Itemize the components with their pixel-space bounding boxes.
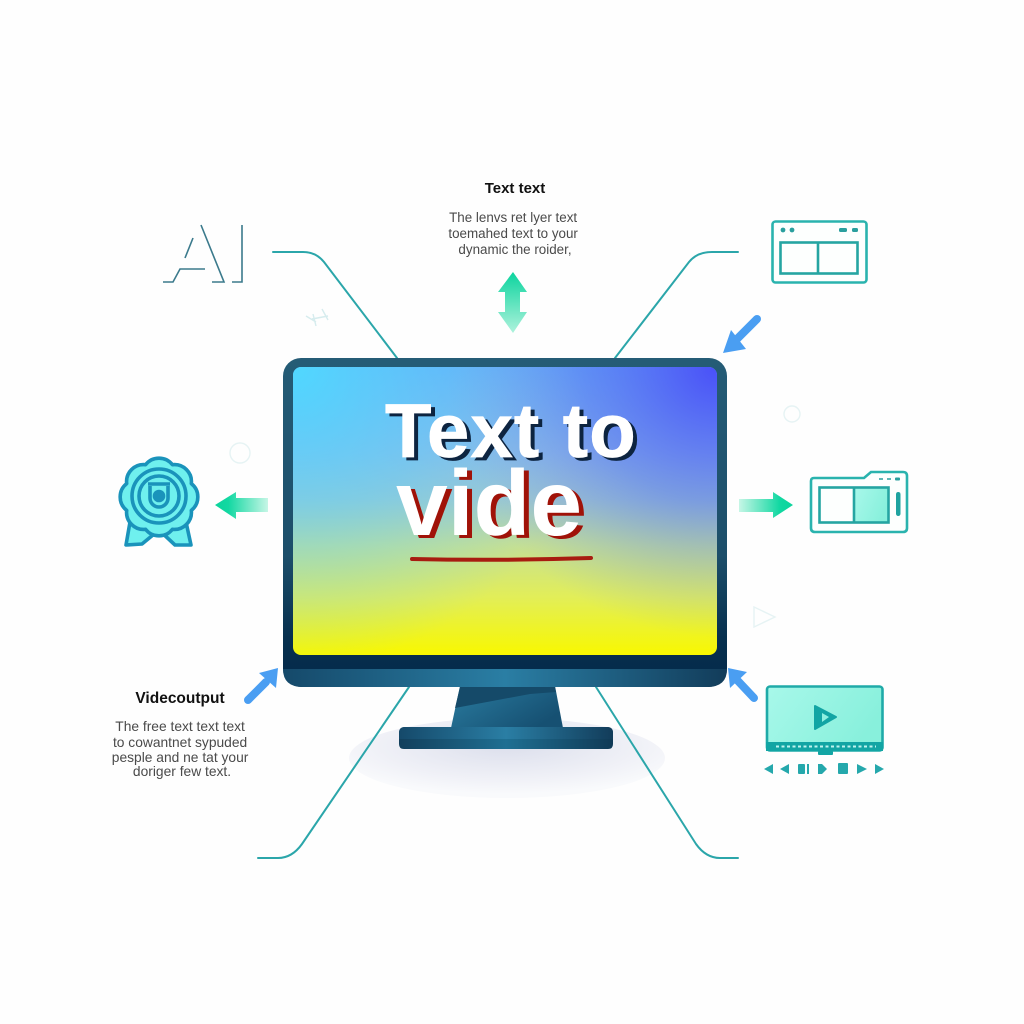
monitor screen: [293, 367, 717, 655]
heading: top text block: Text text: [485, 180, 545, 197]
heading: top text block: [448, 180, 582, 257]
icon: video player: [764, 686, 884, 774]
Videcoutput description text: doriger few text.: [133, 764, 231, 779]
arrow: blue bottom left: [248, 668, 278, 700]
monitor: [283, 358, 727, 749]
arrow: green pointing right: [739, 492, 793, 518]
Videcoutput description text: to cowantnet sypuded: [113, 735, 247, 750]
connector lines: [258, 252, 738, 858]
screen title: Text to: Text to: [385, 389, 637, 474]
screen title: Text to: Text to: [389, 392, 641, 477]
text block: Videcoutput: Videcoutput: [135, 690, 225, 707]
monitor stand shadow: [349, 718, 665, 798]
icon: camera window: [811, 472, 907, 532]
arrow: green pointing left: [215, 492, 268, 519]
Videcoutput description text: pesple and ne tat your: [112, 750, 249, 765]
top description text: dynamic the roider,: [458, 242, 572, 257]
monitor base: [399, 727, 613, 749]
icon: browser window: [772, 222, 866, 282]
arrow: vertical double green: [498, 272, 527, 333]
faint decorative marks: [230, 309, 800, 627]
monitor stand neck: [451, 686, 563, 728]
screen title: vide: vide: [401, 454, 587, 558]
top description text: The lenvs ret lyer text: [449, 210, 577, 225]
icon: AI outline lettering: [163, 225, 242, 282]
screen title: vide: vide: [396, 451, 582, 555]
Videcoutput description text: The free text text text: [115, 719, 245, 734]
arrow: blue bottom right: [728, 668, 754, 698]
red underline: [412, 558, 591, 560]
video player controls: [764, 763, 884, 774]
monitor bezel: [283, 358, 727, 687]
icon: award badge: [120, 458, 198, 545]
top description text: toemahed text to your: [448, 226, 578, 241]
text block: Videcoutput: [112, 690, 252, 779]
arrow: blue pointing to monitor top right: [723, 319, 757, 353]
